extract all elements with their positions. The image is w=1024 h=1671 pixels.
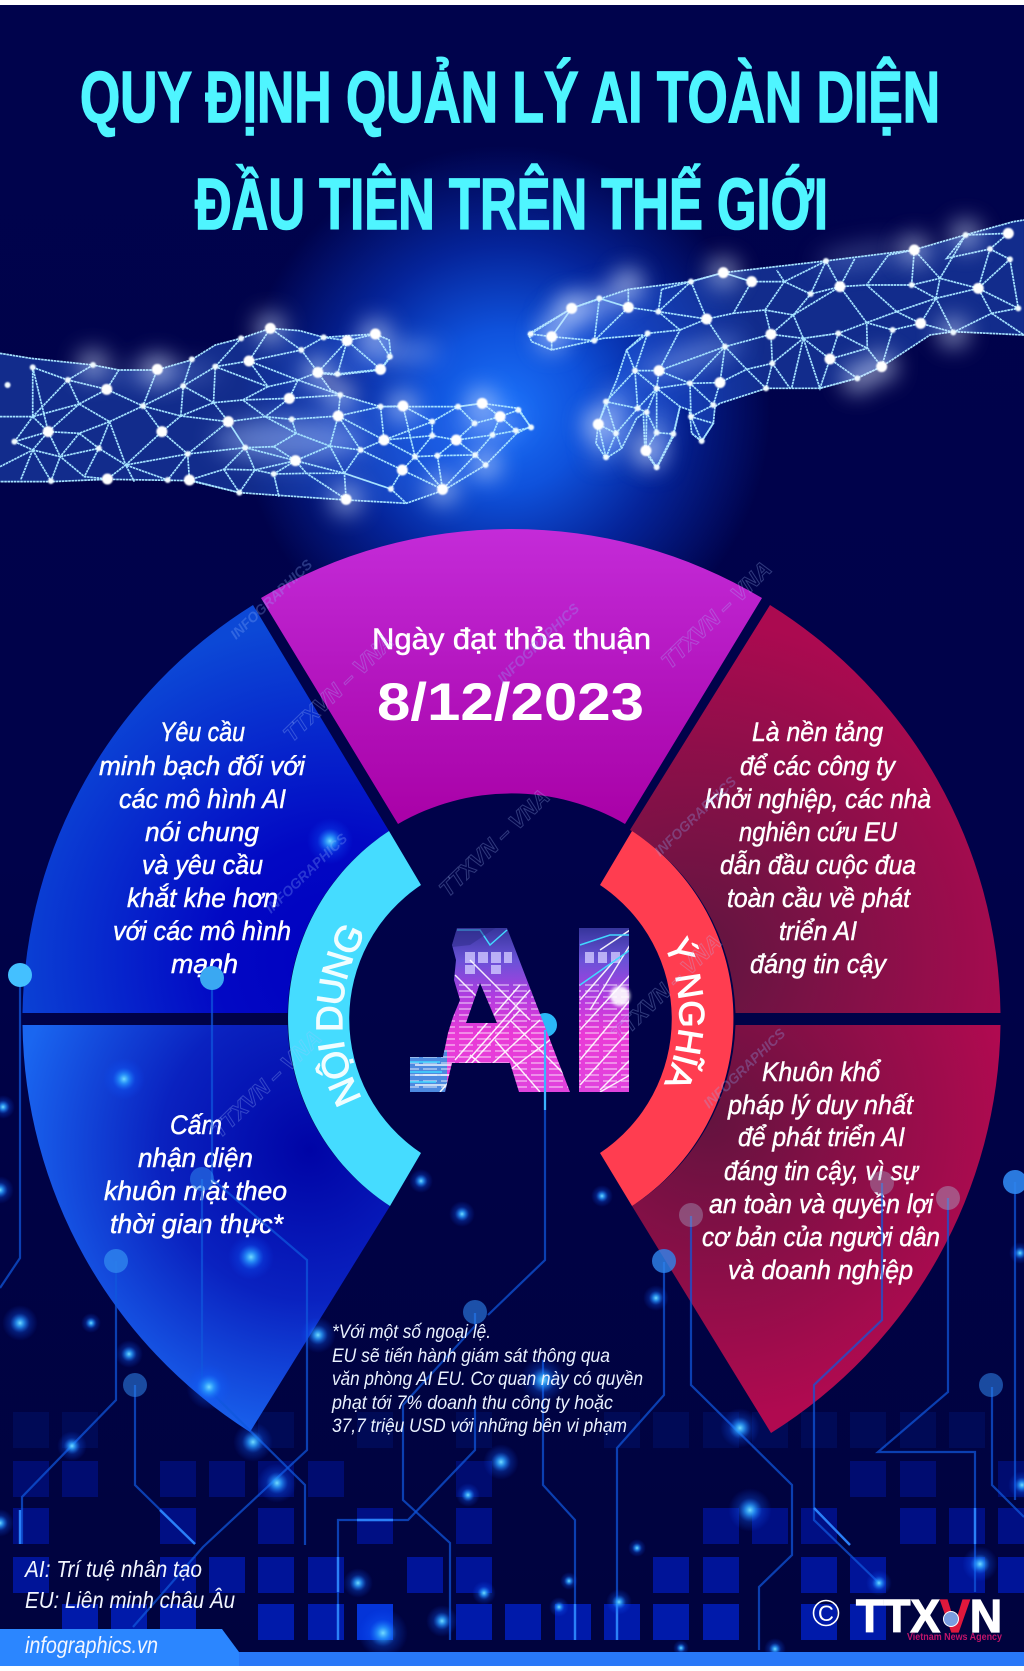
watermarks: TTXVN – VNA: [434, 784, 554, 902]
panel: significance upper sector: Là nền tảng: [752, 717, 883, 747]
footer band: infographics.vn: [25, 1632, 158, 1658]
panel: content upper sector: với các mô hình: [113, 916, 291, 946]
ring: Ý NGHĨA: Ý NGHĨA: [664, 935, 705, 1084]
TTXVN logo: Vietnam News Agency: [907, 1632, 1002, 1643]
watermarks: INFOGRAPHICS: [494, 600, 583, 686]
panel: date agreement sector: Ngày đạt thỏa thuận: [372, 623, 651, 656]
panel: significance lower sector: an toàn và quyền lợi: [709, 1189, 934, 1219]
watermarks: TTXVN – VNA: [206, 1025, 326, 1143]
panel: significance lower sector: để phát triển AI: [738, 1122, 905, 1152]
footnote: phạt tới 7% doanh thu công ty hoặc: [331, 1393, 613, 1414]
abbreviations legend: AI: Trí tuệ nhân tạo: [23, 1556, 202, 1582]
center AI logo: [405, 925, 635, 1110]
footnote: 37,7 triệu USD với những bên vi phạm: [332, 1416, 627, 1437]
watermarks: INFOGRAPHICS: [227, 556, 316, 642]
panel: significance lower sector: cơ bản của người dân: [702, 1222, 940, 1252]
panel: significance upper sector: [630, 605, 1000, 1013]
panel: significance upper sector: triển AI: [779, 916, 857, 946]
circuit lines and nodes: [0, 963, 1024, 1650]
watermarks: [206, 556, 789, 1143]
panel: date agreement sector: [261, 529, 762, 824]
title: [80, 57, 940, 245]
panel: content upper sector: các mô hình AI: [119, 784, 286, 814]
panel: significance lower sector: [632, 1025, 1000, 1433]
background squares: [13, 1412, 985, 1448]
watermarks: INFOGRAPHICS: [262, 830, 351, 916]
TTXVN logo: C: [818, 1601, 834, 1626]
ring: Ý NGHĨA: [600, 831, 734, 1206]
illustration: left digital hand: [0, 328, 531, 503]
footnote: EU sẽ tiến hành giám sát thông qua: [332, 1346, 610, 1367]
panel: content upper sector: mạnh: [171, 949, 238, 979]
panel: significance lower sector: và doanh nghiệp: [728, 1255, 913, 1285]
footer band: [0, 1629, 1024, 1666]
abbreviations legend: [23, 1556, 235, 1613]
footnote: [331, 1322, 643, 1437]
abbreviations legend: EU: Liên minh châu Âu: [25, 1587, 235, 1613]
glowing light spots: [0, 818, 1024, 1660]
panel: content lower sector: nhận diện: [138, 1143, 253, 1173]
watermarks: TTXVN – VNA: [656, 556, 776, 674]
TTXVN logo: TTXVN: [856, 1590, 1002, 1642]
illustration: right digital hand: [528, 220, 1024, 470]
panel: significance upper sector: dẫn đầu cuộc đua: [720, 850, 916, 880]
panel: content upper sector: và yêu cầu: [142, 850, 263, 880]
panel: significance upper sector: để các công ty: [740, 751, 896, 781]
panel: significance lower sector: pháp lý duy nhất: [727, 1090, 914, 1120]
panel: significance upper sector: nghiên cứu EU: [739, 817, 897, 847]
panel: content upper sector: [22, 605, 389, 1013]
panel: content upper sector: nói chung: [145, 817, 259, 847]
panel: significance lower sector: Khuôn khổ: [762, 1057, 882, 1087]
panel: content lower sector: khuôn mặt theo: [104, 1176, 287, 1206]
panel: content upper sector: khắt khe hơn: [127, 882, 278, 913]
footnote: *Với một số ngoại lệ.: [332, 1322, 491, 1343]
panel: significance upper sector: đáng tin cậy: [750, 949, 887, 979]
watermarks: INFOGRAPHICS: [651, 773, 740, 859]
panel: significance lower sector: đáng tin cậy, vì sự: [724, 1156, 920, 1186]
watermarks: TTXVN – VNA: [606, 929, 726, 1047]
panel: content upper sector: minh bạch đối với: [99, 751, 306, 781]
ring: NỘI DUNG: NỘI DUNG: [315, 925, 362, 1108]
watermarks: TTXVN – VNA: [278, 629, 398, 747]
ring: NỘI DUNG: [288, 831, 421, 1206]
panel: content lower sector: thời gian thực*: [110, 1209, 284, 1239]
footnote: văn phòng AI EU. Cơ quan này có quyền: [332, 1369, 643, 1390]
panel: content upper sector: Yêu cầu: [160, 717, 245, 747]
panel: date agreement sector: 8/12/2023: [377, 673, 644, 732]
panel: content lower sector: Cấm: [170, 1110, 222, 1140]
watermarks: INFOGRAPHICS: [700, 1025, 789, 1111]
panel: significance upper sector: toàn cầu về phát: [727, 883, 911, 913]
panel: significance upper sector: khởi nghiệp, các nhà: [705, 784, 931, 814]
panel: content lower sector: [22, 1025, 390, 1432]
